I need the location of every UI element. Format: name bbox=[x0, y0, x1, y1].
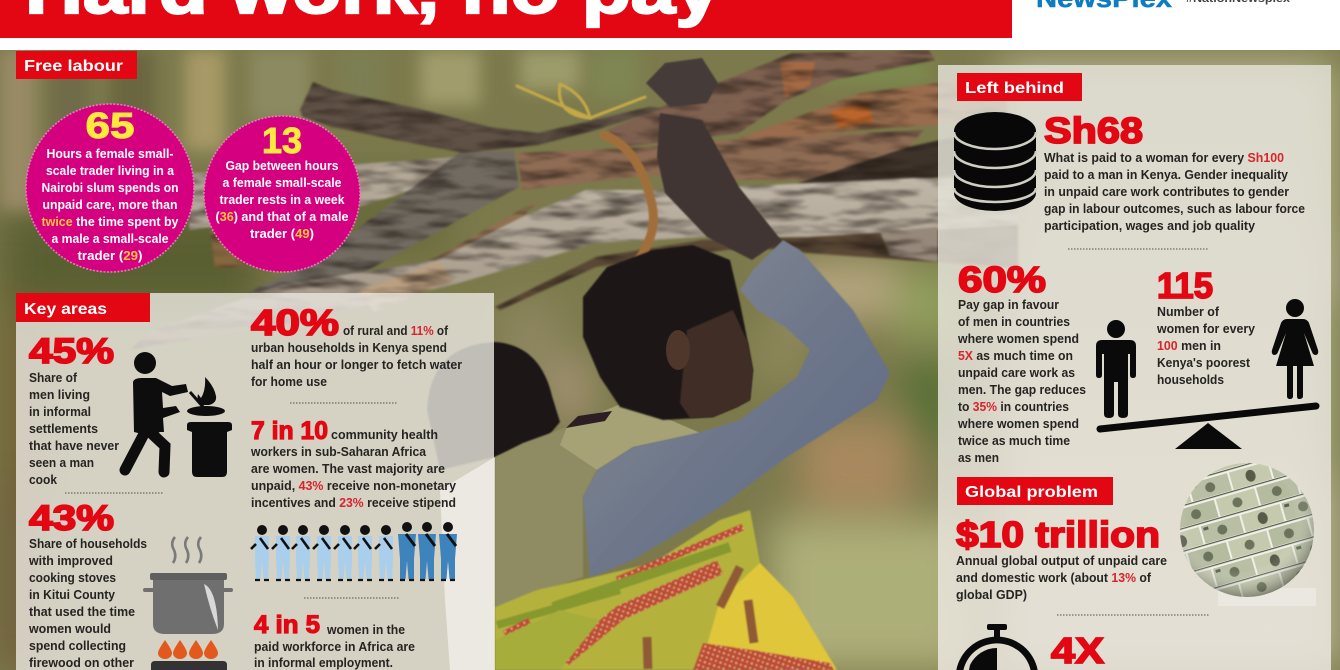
icon: stopwatch bbox=[956, 624, 1038, 670]
stat: 43% improved stoves: with improved bbox=[28, 554, 113, 568]
circle callout: 65 hours: trader (29) bbox=[78, 249, 142, 263]
stat: 45% men cooking: seen a man bbox=[29, 456, 94, 470]
heading: Free labour bbox=[16, 51, 137, 79]
circle callout: 65 hours: a male a small-scale bbox=[52, 232, 169, 246]
stat: 43% improved stoves: that used the time bbox=[29, 605, 135, 619]
stat: 7 in 10 health workers: workers in sub-Saharan Africa bbox=[250, 445, 427, 459]
background stems behind circles bbox=[189, 157, 459, 268]
stat: 43% improved stoves: spend collecting bbox=[29, 639, 126, 653]
stat: 4 in 5 informal employment: women in the bbox=[326, 623, 405, 637]
stat: 60% pay gap: men. The gap reduces bbox=[958, 383, 1086, 397]
stat: $10 trillion: global GDP) bbox=[956, 588, 1027, 602]
circle callout: 13 hours bbox=[204, 116, 360, 272]
stat: 40% fetch water: half an hour or longer to fetch water bbox=[251, 358, 462, 372]
stat: 45% men cooking: settlements bbox=[29, 422, 98, 436]
stat: Sh68: gap in labour outcomes, such as labour force bbox=[1044, 202, 1305, 216]
heading: Key areas bbox=[16, 293, 150, 322]
divider bbox=[1068, 248, 1209, 250]
heading: Global problem: Global problem bbox=[965, 484, 1098, 501]
stat: 45% men cooking: in informal bbox=[29, 405, 91, 419]
stat: 43% improved stoves bbox=[28, 499, 147, 670]
circle callout: 13 hours: trader (49) bbox=[250, 227, 314, 241]
stat: Sh68 bbox=[1044, 110, 1305, 233]
stat: 40% fetch water: of rural and 11% of bbox=[343, 324, 449, 338]
stat: 60% pay gap: unpaid care work as bbox=[958, 366, 1075, 380]
wrapper bbox=[495, 510, 837, 670]
heading: Left behind bbox=[957, 73, 1082, 101]
icon: ball of money bbox=[1180, 463, 1316, 606]
divider bbox=[304, 597, 400, 599]
stat: 45% men cooking: cook bbox=[29, 473, 57, 487]
stat: 43% improved stoves: 43% bbox=[29, 499, 114, 538]
stat: Sh68: paid to a man in Kenya. Gender inequality bbox=[1044, 168, 1288, 182]
stat: 115 women: Number of bbox=[1157, 305, 1220, 319]
stat: 115 women: 115 bbox=[1157, 265, 1213, 306]
header title band bbox=[0, 0, 1012, 38]
stat: 40% fetch water: 40% bbox=[251, 302, 339, 343]
firewood logs bbox=[130, 50, 1018, 350]
stat: 60% pay gap: where women spend bbox=[957, 332, 1079, 346]
stat: 4 in 5 informal employment: in informal employment. bbox=[254, 656, 393, 670]
circle callout: 65 hours: Hours a female small- bbox=[46, 147, 174, 161]
olive sling bbox=[494, 422, 696, 608]
stat: 7 in 10 health workers: community health bbox=[331, 428, 438, 442]
stat: 43% improved stoves: in Kitui County bbox=[29, 588, 115, 602]
stat: 60% pay gap: where women spend bbox=[957, 417, 1079, 431]
divider bbox=[65, 492, 164, 494]
stat: 43% improved stoves: women would bbox=[28, 622, 111, 636]
stat: 60% pay gap: 60% bbox=[958, 259, 1046, 300]
stat: 60% pay gap: 5X as much time on bbox=[958, 349, 1073, 363]
circle callout: 65 hours: twice the time spent by bbox=[42, 215, 179, 229]
collar bbox=[566, 411, 612, 428]
heading: Global problem bbox=[957, 477, 1113, 505]
heading: Left behind: Left behind bbox=[965, 80, 1064, 97]
stat: $10 trillion: Annual global output of unpaid care bbox=[956, 554, 1167, 568]
stat: 60% pay gap: Pay gap in favour bbox=[958, 298, 1059, 312]
divider bbox=[290, 402, 397, 404]
stat: 43% improved stoves: firewood on other bbox=[29, 656, 134, 670]
stat: 43% improved stoves: Share of households bbox=[29, 537, 147, 551]
heading: Key areas: Key areas bbox=[24, 301, 107, 318]
stat: 115 women: 100 men in bbox=[1157, 339, 1221, 353]
stat: 7 in 10 health workers: are women. The vast majority are bbox=[251, 462, 445, 476]
stat: Sh68: in unpaid care work contributes to gender bbox=[1044, 185, 1289, 199]
icon: stack of coins bbox=[954, 112, 1036, 211]
stat: 45% men cooking: Share of bbox=[29, 371, 78, 385]
divider bbox=[1057, 614, 1210, 616]
heading: Free labour: Free labour bbox=[24, 58, 123, 75]
circle callout: 65 hours: 65 bbox=[86, 105, 134, 146]
cloth behind panel bbox=[440, 457, 495, 670]
stat: 4X: 4X bbox=[1051, 630, 1104, 670]
pictogram: 10 health workers, 7 women highlighted bbox=[251, 522, 457, 580]
panel: left frosted background bbox=[16, 293, 494, 670]
baby head bbox=[427, 342, 560, 470]
stat: $10 trillion: and domestic work (about 13% of bbox=[956, 571, 1152, 585]
stat: 115 women: households bbox=[1157, 373, 1224, 387]
stat: 115 women: women for every bbox=[1156, 322, 1255, 336]
stat: 40% fetch water: for home use bbox=[251, 375, 327, 389]
head bbox=[583, 245, 753, 420]
circle callout: 13 hours: 13 bbox=[262, 120, 302, 161]
circle callout: 65 hours: Nairobi slum spends on bbox=[42, 181, 178, 195]
torso and sleeve bbox=[583, 240, 890, 578]
stat: 115 women bbox=[1156, 265, 1255, 387]
stat: 45% men cooking: men living bbox=[29, 388, 90, 402]
stat: 4 in 5 informal employment: 4 in 5 bbox=[254, 611, 320, 639]
stat: 60% pay gap: as men bbox=[958, 451, 999, 465]
stat: Sh68: participation, wages and job quality bbox=[1044, 219, 1255, 233]
stat: 60% pay gap: to 35% in countries bbox=[958, 400, 1069, 414]
stat: 45% men cooking: that have never bbox=[29, 439, 119, 453]
circle callout: 65 hours: unpaid care, more than bbox=[42, 198, 178, 212]
icon: man cooking bbox=[125, 352, 232, 477]
stat: 43% improved stoves: cooking stoves bbox=[29, 571, 116, 585]
circle callout: 65 hours bbox=[26, 104, 194, 272]
stat: 4 in 5 informal employment bbox=[254, 611, 415, 670]
panel: right frosted background bbox=[938, 65, 1331, 670]
stat: 4 in 5 informal employment: paid workforce in Africa are bbox=[254, 640, 415, 654]
stat: 115 women: Kenya's poorest bbox=[1157, 356, 1251, 370]
stat: Sh68: Sh68 bbox=[1044, 110, 1143, 151]
circle callout: 13 hours: Gap between hours bbox=[226, 159, 339, 173]
stat: 40% fetch water: urban households in Kenya spend bbox=[251, 341, 447, 355]
stat: 7 in 10 health workers: 7 in 10 bbox=[251, 417, 328, 445]
icon: balance scale with man and woman bbox=[1096, 299, 1318, 449]
stat: 45% men cooking: 45% bbox=[29, 332, 114, 371]
stat: $10 trillion bbox=[956, 514, 1167, 602]
stat: $10 trillion: $10 trillion bbox=[956, 514, 1160, 555]
stat: 7 in 10 health workers bbox=[250, 417, 456, 510]
stat: 40% fetch water bbox=[251, 302, 462, 389]
circle callout: 65 hours: scale trader living in a bbox=[46, 164, 175, 178]
circle callout: 13 hours: a female small-scale bbox=[222, 176, 342, 190]
icon: pot on stove bbox=[143, 537, 233, 670]
stat: 60% pay gap bbox=[957, 259, 1086, 465]
stat: 60% pay gap: twice as much time bbox=[958, 434, 1070, 448]
circle callout: 13 hours: trader rests in a week bbox=[220, 193, 345, 207]
NewsPlex logo bbox=[1036, 0, 1291, 13]
stat: 7 in 10 health workers: incentives and 23% receive stipend bbox=[251, 496, 456, 510]
strap and ties bbox=[517, 84, 653, 277]
arm and hands bbox=[657, 113, 781, 260]
stat: Sh68: What is paid to a woman for every Sh100 bbox=[1044, 151, 1284, 165]
stat: 45% men cooking bbox=[29, 332, 119, 487]
white header background bbox=[0, 0, 1340, 50]
circle callout: 13 hours: (36) and that of a male bbox=[216, 210, 349, 224]
stat: 60% pay gap: of men in countries bbox=[958, 315, 1070, 329]
stat: 7 in 10 health workers: unpaid, 43% receive non-monetary bbox=[251, 479, 456, 493]
